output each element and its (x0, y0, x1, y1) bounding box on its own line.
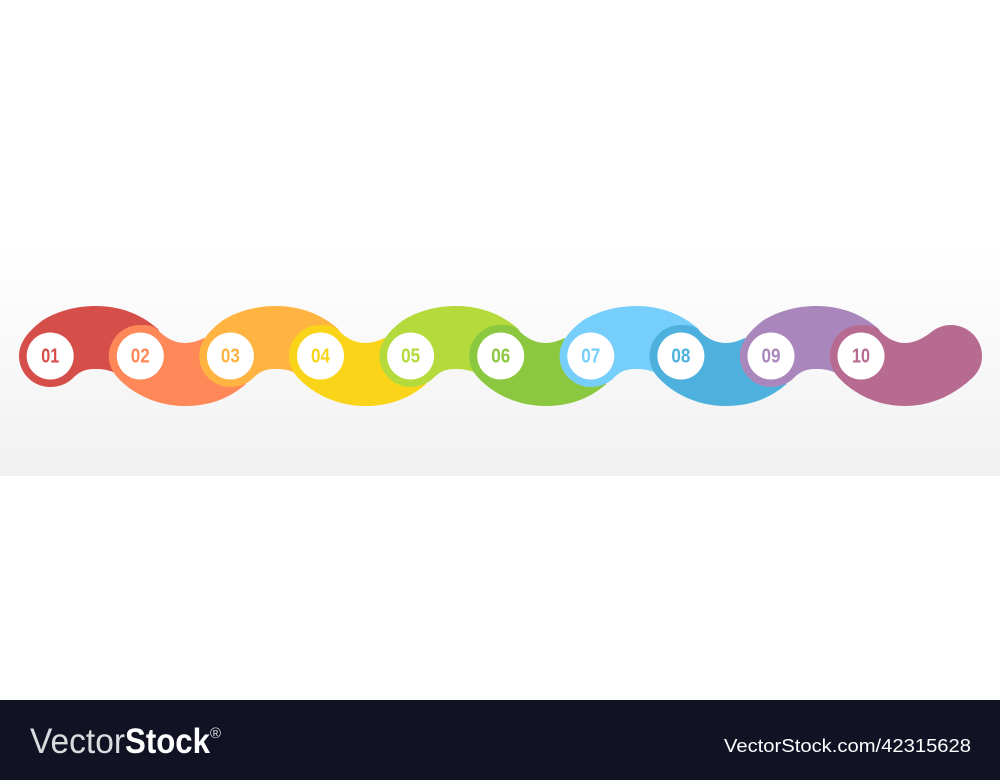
footer bar (0, 700, 1000, 780)
number badge 09: 09 (762, 346, 780, 368)
number badge 04 (297, 332, 344, 380)
number badge 07 (567, 332, 614, 380)
number badge 07: 07 (581, 346, 600, 368)
segment 01 (19, 306, 172, 388)
number badge 03: 03 (221, 346, 240, 368)
segment 10 (830, 325, 982, 406)
number badge 08 (657, 332, 704, 380)
segment 07 (560, 306, 713, 388)
segment 03 (199, 306, 352, 388)
segment 06 (469, 325, 606, 406)
segment 05 (379, 306, 532, 388)
number badge 05: 05 (401, 346, 420, 368)
footer logo: Vector (30, 722, 125, 761)
number badge 10 (838, 332, 884, 380)
step chain (19, 306, 982, 406)
footer logo (30, 722, 221, 761)
number badge 02: 02 (131, 346, 150, 368)
footer logo: Stock (125, 722, 210, 761)
number badge 04: 04 (311, 346, 331, 368)
number badge 01 (27, 332, 74, 380)
segment 09 (740, 306, 893, 388)
number badge 09 (748, 332, 794, 380)
background band (0, 245, 1000, 476)
number badge 03 (207, 332, 254, 380)
footer image id: VectorStock.com/42315628 (724, 736, 971, 756)
number badge 06 (477, 332, 524, 380)
segment 04 (289, 325, 426, 406)
number badge 06: 06 (491, 346, 510, 368)
number badge 02 (117, 332, 164, 380)
number badge 10: 10 (852, 346, 870, 368)
number badge 05 (387, 332, 434, 380)
footer logo: ® (210, 725, 221, 742)
number badge 01: 01 (41, 346, 59, 368)
segment 08 (649, 325, 787, 406)
number badge 08: 08 (671, 346, 690, 368)
segment 02 (109, 325, 246, 406)
